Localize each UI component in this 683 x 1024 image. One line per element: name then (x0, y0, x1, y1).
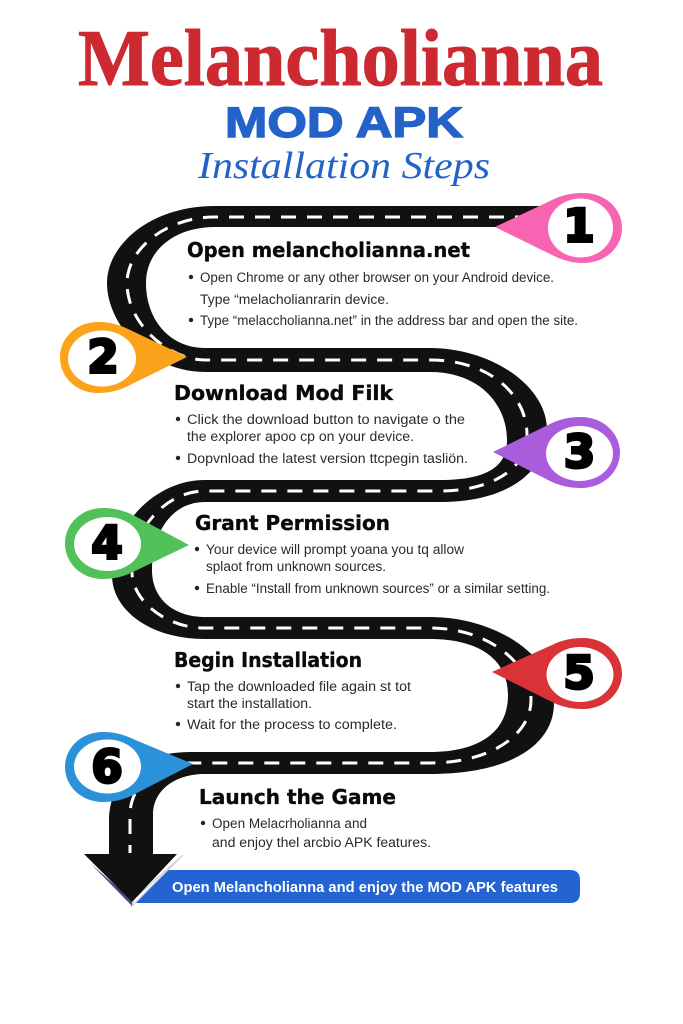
step 3 text (195, 511, 550, 596)
step 3 marker: 3 (564, 426, 595, 478)
step 6 text: and enjoy thel arcbio APK features. (212, 835, 431, 850)
step 1 marker: 1 (563, 200, 595, 252)
step 2 text (174, 381, 468, 466)
step 2 text: Click the download button to navigate o the (187, 412, 465, 427)
step 3 text: splaot from unknown sources. (206, 559, 386, 574)
step 1 marker (495, 193, 622, 263)
step 2 text: Dopvnload the latest version ttcpegin tasliön. (187, 451, 468, 466)
subtitle: Installation Steps: Installation Steps (197, 145, 490, 187)
step 1 text (187, 238, 578, 328)
step 2 text: the explorer apoo cp on your device. (187, 429, 414, 444)
step 5 text: Tap the downloaded file again st tot (187, 679, 411, 694)
step 2 marker (60, 322, 187, 393)
step 3 text: Your device will prompt yoana you tq allow (206, 542, 464, 557)
winding road with arrow (84, 206, 554, 906)
step 3 text: Grant Permission (195, 511, 390, 535)
step 4 marker (65, 508, 189, 579)
step 6 marker (65, 732, 193, 802)
step 1 text: Open Chrome or any other browser on your Android device. (200, 270, 554, 285)
step 1 text: Type “melaccholianna.net” in the address bar and open the site. (200, 313, 578, 328)
step 3 text: Enable “Install from unknown sources” or a similar setting. (206, 581, 550, 596)
step 6 text: Launch the Game (199, 785, 396, 809)
step 1 text: Type “melacholianrarin device. (200, 292, 389, 307)
step 5 marker: 5 (563, 646, 595, 700)
title: Melancholianna (78, 15, 603, 103)
banner: Open Melancholianna and enjoy the MOD APK features (172, 879, 558, 896)
step 1 text: Open melancholianna.net (187, 238, 470, 262)
step 6 text (199, 785, 431, 850)
step 5 text: Wait for the process to complete. (187, 717, 397, 732)
step 3 marker (493, 417, 620, 488)
banner (136, 870, 580, 903)
subtitle: MOD APK: MOD APK (225, 99, 463, 147)
step 4 marker: 4 (91, 516, 123, 570)
step 5 text (174, 648, 411, 732)
step 2 text: Download Mod Filk (174, 381, 394, 405)
step 5 marker (492, 638, 622, 709)
step 6 marker: 6 (91, 740, 123, 794)
step 5 text: Begin Installation (174, 648, 362, 672)
step 5 text: start the installation. (187, 696, 312, 711)
step 6 text: Open Melacrholianna and (212, 816, 367, 831)
step 2 marker: 2 (87, 330, 119, 384)
